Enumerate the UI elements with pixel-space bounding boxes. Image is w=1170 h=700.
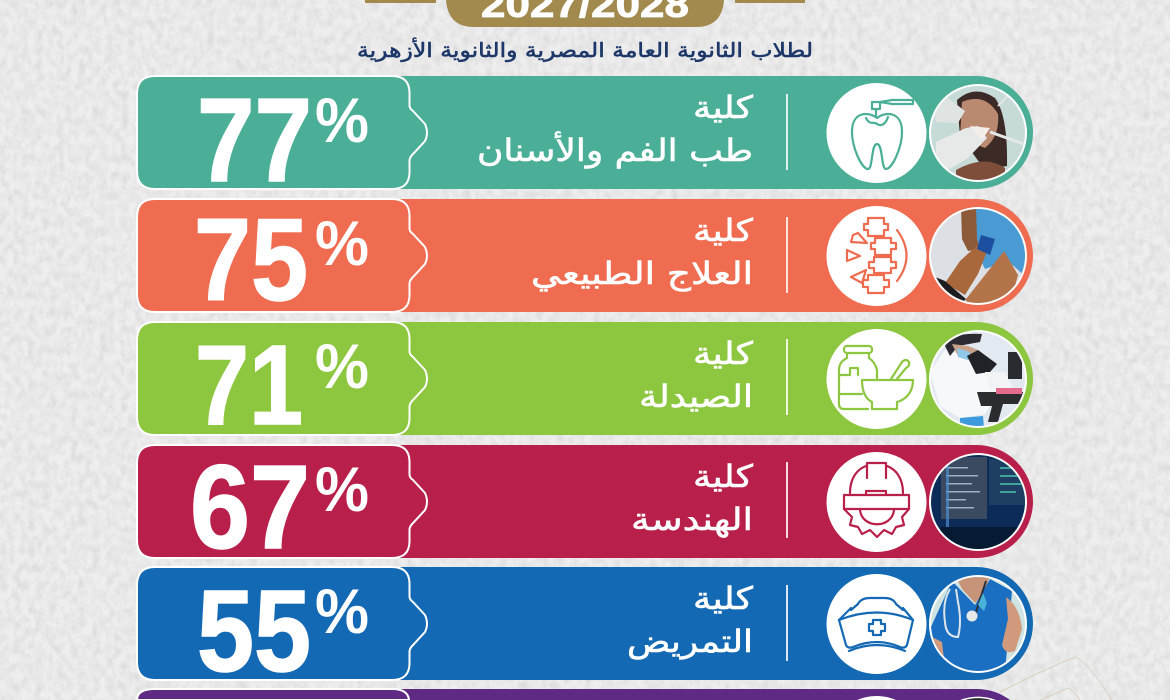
bar — [150, 689, 1010, 700]
photo circle — [960, 697, 996, 700]
percent tab — [137, 76, 427, 189]
percent tab — [137, 567, 427, 680]
percent tab — [137, 199, 427, 312]
percent sign: % — [315, 86, 369, 156]
header year badge — [365, 0, 805, 27]
row: pharmacy 71% — [137, 322, 1033, 448]
label: التمريض — [627, 624, 753, 660]
label: كلية — [693, 90, 753, 126]
photo: scientist with microscope — [929, 330, 1027, 428]
percent sign: % — [315, 577, 369, 647]
percent tab — [137, 322, 427, 435]
percent sign: % — [315, 455, 369, 525]
row: dentistry 77% — [136, 75, 1033, 190]
photo: physiotherapy — [929, 207, 1027, 305]
percent tab — [137, 689, 409, 700]
label: طب الفم والأسنان — [477, 131, 753, 169]
percent sign: % — [315, 332, 369, 402]
label — [639, 336, 753, 415]
value: 75 — [194, 194, 308, 325]
row: engineering 67% — [136, 444, 1033, 559]
bar — [150, 445, 1033, 558]
label: كلية — [693, 581, 753, 617]
decorative gold outline bottom right — [1000, 657, 1112, 700]
value: 71 — [195, 322, 303, 448]
icon: pharmacy bottle and mortar — [826, 329, 926, 429]
icon: nurse cap — [826, 574, 926, 674]
label: الصيدلة — [639, 379, 753, 415]
label — [531, 213, 753, 292]
percent tab — [137, 445, 427, 558]
row: cut-off purple — [137, 689, 1010, 700]
value: 55 — [197, 566, 311, 696]
icon: tooth — [826, 83, 926, 183]
bar — [150, 76, 1033, 189]
label: الهندسة — [631, 502, 753, 538]
icon: spine — [826, 206, 926, 306]
photo: code screens — [929, 453, 1027, 551]
percent sign: % — [315, 209, 369, 279]
bar — [150, 567, 1033, 680]
label: العلاج الطبيعي — [531, 256, 753, 292]
row: physiotherapy 75% — [136, 198, 1033, 313]
label: كلية — [693, 336, 753, 372]
bar — [150, 199, 1033, 312]
icon circle — [857, 696, 896, 700]
photo: dentist — [929, 84, 1027, 184]
label — [477, 90, 753, 169]
label: كلية — [693, 213, 753, 249]
value: 77 — [197, 74, 312, 207]
row: nursing 55% — [136, 566, 1033, 681]
label: كلية — [693, 459, 753, 495]
bar — [150, 322, 1033, 435]
photo: nurse — [929, 575, 1027, 673]
label — [627, 581, 753, 660]
label — [631, 459, 753, 538]
subtitle: لطلاب الثانوية العامة المصرية والثانوية الأزهرية — [357, 38, 813, 62]
icon: helmet and gear — [826, 452, 926, 552]
value: 67 — [190, 441, 310, 574]
